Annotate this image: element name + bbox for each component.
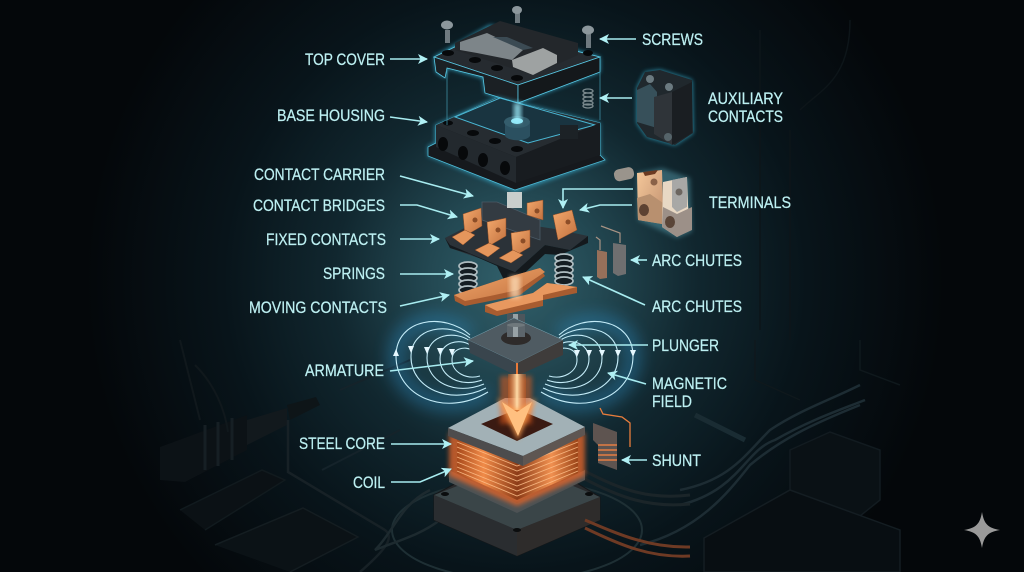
right labels: FIELD xyxy=(652,392,692,411)
carrier shaft glow xyxy=(507,192,522,208)
screws xyxy=(441,6,594,48)
left labels: MOVING CONTACTS xyxy=(249,298,387,317)
arc chutes xyxy=(596,226,626,279)
magnetic field xyxy=(393,322,636,403)
left labels xyxy=(249,50,387,492)
coil assembly xyxy=(434,398,600,556)
right labels: CONTACTS xyxy=(708,107,783,126)
left labels: STEEL CORE xyxy=(299,434,385,453)
shunt xyxy=(593,408,630,470)
right labels xyxy=(642,30,791,470)
small terminal screw xyxy=(613,166,635,182)
left labels: TOP COVER xyxy=(305,50,385,69)
energy beam xyxy=(497,374,537,440)
right labels: AUXILIARY xyxy=(708,89,783,108)
icon: sparkle watermark xyxy=(964,512,1000,548)
left labels: CONTACT BRIDGES xyxy=(253,196,385,215)
right labels: ARC CHUTES xyxy=(652,297,742,316)
guide lines xyxy=(447,70,600,125)
left labels: COIL xyxy=(353,473,385,492)
left labels: CONTACT CARRIER xyxy=(254,165,385,184)
contact carrier with fixed contacts xyxy=(445,200,588,282)
plunger shaft xyxy=(507,314,525,338)
armature block xyxy=(468,318,563,376)
auxiliary contacts xyxy=(637,70,693,145)
base housing xyxy=(428,97,607,192)
terminals xyxy=(637,168,692,238)
right labels: TERMINALS xyxy=(709,193,791,212)
leader arrows xyxy=(390,39,648,482)
right labels: PLUNGER xyxy=(652,336,719,355)
right labels: SCREWS xyxy=(642,30,703,49)
light beam from cover to housing xyxy=(514,103,521,122)
coil output cable xyxy=(585,520,690,556)
background machinery and cables xyxy=(160,20,900,572)
moving contacts xyxy=(454,268,577,316)
top cover xyxy=(434,21,600,103)
left labels: ARMATURE xyxy=(305,361,384,380)
springs xyxy=(459,254,573,294)
right labels: SHUNT xyxy=(652,451,701,470)
left labels: FIXED CONTACTS xyxy=(266,230,386,249)
left labels: BASE HOUSING xyxy=(277,106,385,125)
glowing arrow tip xyxy=(502,402,532,436)
left labels: SPRINGS xyxy=(323,264,385,283)
right labels: MAGNETIC xyxy=(652,374,727,393)
auxiliary spring xyxy=(583,89,593,108)
right labels: ARC CHUTES xyxy=(652,251,742,270)
